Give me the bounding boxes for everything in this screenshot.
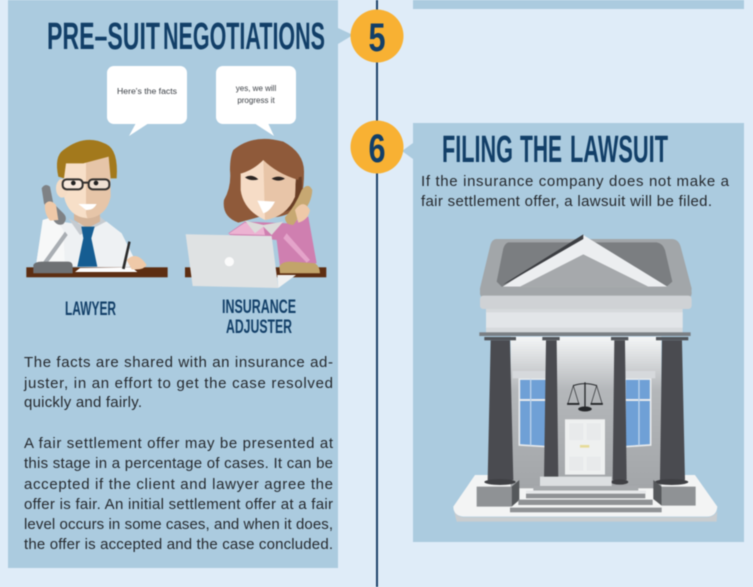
text block: facts shared	[23, 354, 333, 411]
text block: facts shared: quickly and fairly.	[24, 394, 142, 411]
heading: pre-suit negotiations: PRE–SUIT	[47, 16, 160, 58]
phone handset and hand	[42, 185, 66, 225]
panel: previous step remainder	[413, 0, 744, 9]
pediment	[503, 235, 667, 287]
step badge 5	[350, 10, 404, 62]
neck	[74, 210, 100, 228]
text block: settlement offer: this stage in a percentage of cases. It can be	[24, 455, 333, 472]
step badge 6	[350, 120, 404, 174]
heading: pre-suit negotiations	[47, 16, 325, 58]
text block: settlement offer: level occurs in some cases, and when it does,	[24, 516, 333, 533]
speech bubble: lawyer	[107, 66, 187, 136]
laptop	[186, 234, 278, 288]
label: insurance adjuster	[222, 297, 296, 338]
text block: filing description: fair settlement offer, a lawsuit will be filed.	[421, 193, 712, 210]
heading: filing the lawsuit: THE	[520, 129, 562, 171]
face	[64, 160, 110, 218]
label: insurance adjuster: ADJUSTER	[226, 317, 292, 338]
collar	[245, 221, 283, 235]
face	[241, 158, 296, 220]
panel pointer	[402, 143, 413, 159]
collar	[68, 217, 106, 235]
writing hand and pen	[127, 256, 147, 270]
label: insurance adjuster: INSURANCE	[222, 297, 296, 318]
folder stack	[279, 262, 320, 273]
text block: settlement offer: offer is fair. An initial settlement offer at a fair	[24, 496, 333, 513]
desk phone	[33, 262, 73, 273]
eyes	[245, 176, 258, 180]
hair back	[224, 139, 304, 223]
speech bubble: insurance adjuster: progress it	[237, 96, 275, 105]
blouse	[228, 217, 317, 267]
text block: filing description: If the insurance company does not make a	[421, 173, 730, 190]
panel pointer	[338, 28, 353, 44]
text block: settlement offer	[24, 435, 334, 553]
text block: facts shared: The facts are shared with an insurance ad-	[24, 354, 333, 371]
scales of justice	[567, 382, 603, 411]
step badge 5: 5	[368, 16, 386, 60]
hair	[57, 140, 117, 178]
step badge 6: 6	[368, 127, 386, 171]
illustration: lawyer at desk	[26, 140, 168, 277]
heading: filing the lawsuit	[442, 129, 668, 171]
text block: settlement offer: accepted if the client and lawyer agree the	[24, 476, 333, 493]
heading: filing the lawsuit: FILING	[442, 129, 513, 171]
shirt	[36, 220, 137, 268]
steps	[510, 477, 662, 512]
text block: settlement offer: the offer is accepted and the case concluded.	[24, 536, 333, 553]
panel: filing the lawsuit	[402, 123, 744, 542]
illustration: insurance adjuster at laptop	[185, 139, 326, 288]
heading: filing the lawsuit: LAWSUIT	[570, 129, 668, 171]
label: lawyer: LAWYER	[65, 299, 116, 320]
back wall	[511, 337, 661, 488]
desk	[185, 267, 326, 277]
heading: pre-suit negotiations: NEGOTIATIONS	[163, 16, 325, 58]
text block: filing description	[421, 173, 730, 210]
fringe	[238, 145, 302, 180]
timeline line	[376, 0, 378, 587]
panel: pre-suit negotiations	[8, 0, 353, 568]
windows	[519, 379, 651, 447]
entablature	[480, 288, 692, 298]
base platform	[453, 475, 717, 517]
tie	[77, 227, 97, 267]
desk	[26, 267, 168, 277]
door	[565, 419, 605, 475]
illustration: courthouse	[453, 234, 717, 522]
text block: settlement offer: A fair settlement offer may be presented at	[24, 435, 334, 452]
columns	[484, 337, 688, 485]
paper	[75, 267, 137, 272]
window ledges	[513, 371, 655, 378]
glasses	[63, 179, 83, 189]
smile	[78, 204, 97, 210]
column plinths	[477, 480, 696, 507]
phone and hand	[285, 186, 312, 225]
text block: facts shared: juster, in an effort to get the case resolved	[23, 375, 333, 392]
smile	[257, 201, 275, 213]
speech bubble: insurance adjuster: yes, we will	[236, 84, 276, 93]
speech bubble: lawyer: Here's the facts	[117, 87, 177, 96]
roof	[480, 239, 692, 298]
speech bubble: insurance adjuster	[216, 66, 296, 136]
